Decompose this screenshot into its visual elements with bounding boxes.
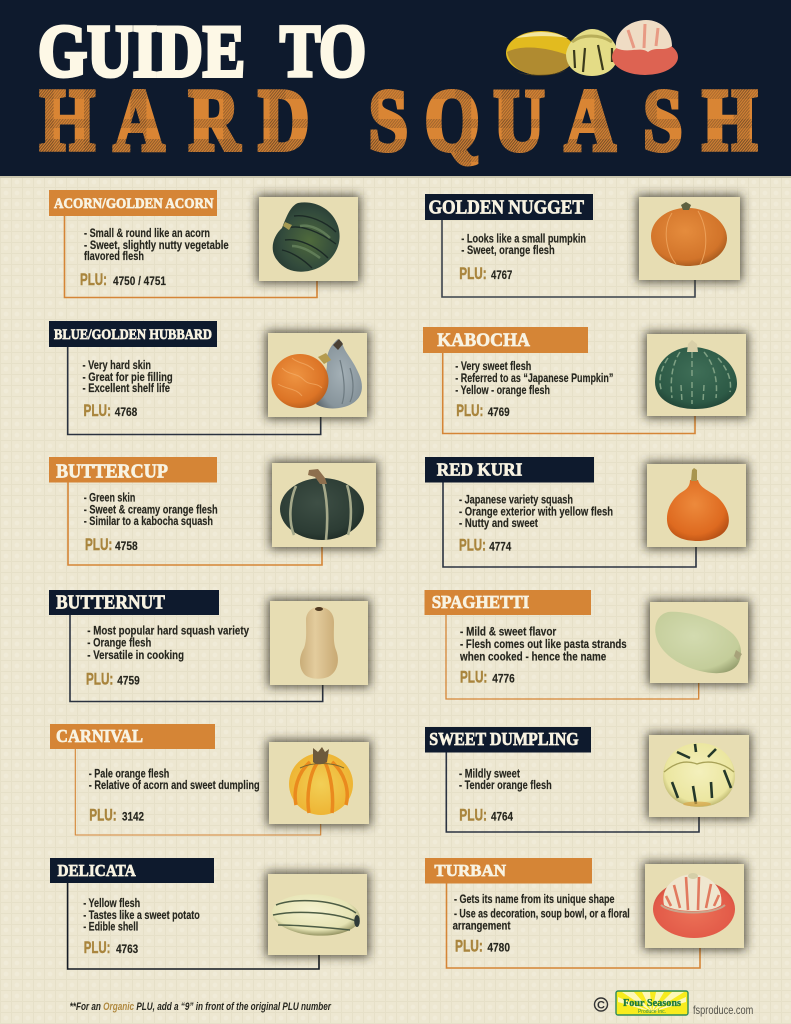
plu: 4758 [115,541,138,553]
plu: 4763 [116,944,138,956]
text block: - Mildly sweet [459,768,520,780]
text block: - Excellent shelf life [82,383,170,395]
footnote: **For an Organic PLU, add a “9” in front of the original PLU number [70,1001,332,1013]
text block: - Looks like a small pumpkin [461,234,586,246]
text block: - Yellow - orange flesh [455,385,550,397]
connector line [442,220,695,297]
text block: - Small & round like an acorn [84,228,210,240]
photo: hubbard squash [268,333,367,417]
panel: turban [425,858,744,968]
heading: RED KURI [437,459,522,479]
text block: - Great for pie filling [82,372,173,384]
text block: - Mild & sweet flavor [460,626,557,638]
heading [49,321,217,347]
plu: PLU: [460,669,487,687]
panel: kabocha [423,327,746,434]
panel: carnival [50,724,369,835]
photo: carnival squash [269,742,369,824]
text block: - Tender orange flesh [459,780,552,792]
connector line [443,482,696,567]
copyright symbol: C [597,1000,605,1012]
plu: 4776 [492,674,515,686]
plu: PLU: [456,402,483,420]
heading [50,858,214,883]
heading: TURBAN [434,861,507,880]
connector line [75,749,321,835]
plu: PLU: [84,939,111,957]
text block: - Very sweet flesh [455,361,531,373]
text block: - Referred to as “Japanese Pumpkin” [455,373,613,385]
heading: BUTTERNUT [56,593,165,614]
heading [425,858,592,884]
photo: red kuri squash [647,464,746,547]
text block: - Very hard skin [82,360,151,372]
text block: arrangement [453,920,511,932]
text block: - Relative of acorn and sweet dumpling [89,780,260,792]
heading [423,327,588,353]
title: hard squash: HARD SQUASH [40,72,757,169]
photo: buttercup squash [272,463,376,547]
plu: PLU: [80,271,107,289]
text block [84,228,229,263]
text block: - Pale orange flesh [89,768,169,780]
heading [425,457,594,482]
text block [461,234,586,257]
text block: - Nutty and sweet [459,518,538,530]
text block [87,626,249,662]
plu: PLU: [84,402,111,420]
title: guide to: TO [280,11,366,93]
heading [424,590,591,615]
text block: when cooked - hence the name [459,652,606,664]
photo: delicata squash [268,874,367,955]
text block: - Similar to a kabocha squash [84,516,213,528]
text block [459,626,627,664]
plu: 4750 / 4751 [113,276,167,288]
icon: header squash trio [506,20,678,76]
text block: - Gets its name from its unique shape [454,894,614,906]
heading: SWEET DUMPLING [429,729,579,749]
photo: sweet dumpling squash [649,735,749,817]
connector line [443,352,695,434]
text block: - Sweet & creamy orange flesh [84,504,218,516]
heading [50,724,215,749]
panel: butternut [49,590,368,702]
photo: spaghetti squash [650,602,748,683]
heading [49,190,217,216]
plu: PLU: [459,807,487,825]
plu: 4769 [488,407,510,419]
heading: GOLDEN NUGGET [428,198,584,218]
plu: 4764 [491,812,514,824]
panel: golden nugget [425,194,740,297]
text block [84,492,218,528]
photo: butternut squash [270,601,368,685]
text block [82,360,173,395]
heading [49,590,219,615]
text block: - Sweet, orange flesh [461,245,555,257]
copyright symbol [594,998,608,1012]
heading: KABOCHA [437,330,530,351]
plu: PLU: [89,807,117,825]
header band [0,0,791,178]
heading: DELICATA [58,861,136,880]
panel: sweet dumpling [425,727,749,832]
connector line [64,216,317,298]
text block [455,361,613,397]
connector line [446,615,699,699]
panel: buttercup [49,457,376,565]
title: guide to: GUIDE [38,11,245,93]
panel: blue/golden hubbard [49,321,367,434]
text block: - Flesh comes out like pasta strands [460,639,627,651]
logo: four seasons [616,991,688,1015]
plu: PLU: [86,671,113,689]
panel: red kuri [425,457,746,567]
text block: flavored flesh [84,251,144,263]
heading: ACORN/GOLDEN ACORN [54,196,214,212]
heading: BLUE/GOLDEN HUBBARD [54,327,212,343]
text block: - Edible shell [83,922,138,934]
heading: BUTTERCUP [56,461,168,482]
text block: - Orange flesh [87,638,151,650]
plu: PLU: [459,265,487,283]
photo: acorn squash [259,197,358,281]
plu: 4759 [117,676,140,688]
text block: - Sweet, slightly nutty vegetable [84,240,229,252]
plu: PLU: [459,537,486,555]
connector line [68,883,319,969]
text block: - Most popular hard squash variety [87,626,249,638]
text block: - Orange exterior with yellow flesh [459,506,613,518]
plu: 4767 [491,270,512,282]
connector line [446,883,700,968]
text block: - Tastes like a sweet potato [83,910,200,922]
text block: - Versatile in cooking [87,650,184,662]
text block: - Use as decoration, soup bowl, or a floral [454,908,630,920]
plu: 3142 [122,812,144,824]
text block: - Yellow flesh [83,898,140,910]
connector line [68,347,321,434]
plu: 4774 [489,542,512,554]
text block: - Green skin [84,492,135,504]
plu: 4780 [487,943,510,955]
plu: 4768 [115,407,138,419]
website: fsproduce.com [693,1003,753,1017]
text block [459,494,613,530]
connector line [68,482,322,565]
text block [89,768,260,792]
panel: spaghetti [424,590,748,699]
photo: kabocha squash [647,334,746,416]
heading: SPAGHETTI [432,592,529,612]
text block: - Japanese variety squash [459,494,573,506]
logo: four seasons: Produce Inc. [638,1009,666,1015]
text block [83,898,200,934]
plu: PLU: [85,536,112,554]
plu: PLU: [455,938,483,956]
photo: golden nugget squash [639,197,740,280]
connector line [446,752,699,832]
logo: four seasons: Four Seasons [623,998,681,1009]
text block [459,768,552,792]
heading: CARNIVAL [56,726,143,746]
plu [80,271,167,289]
text block [453,894,630,932]
heading [49,457,217,482]
panel: delicata [50,858,367,969]
photo: turban squash [645,864,744,948]
panel: acorn [49,190,358,298]
connector line [70,615,323,702]
